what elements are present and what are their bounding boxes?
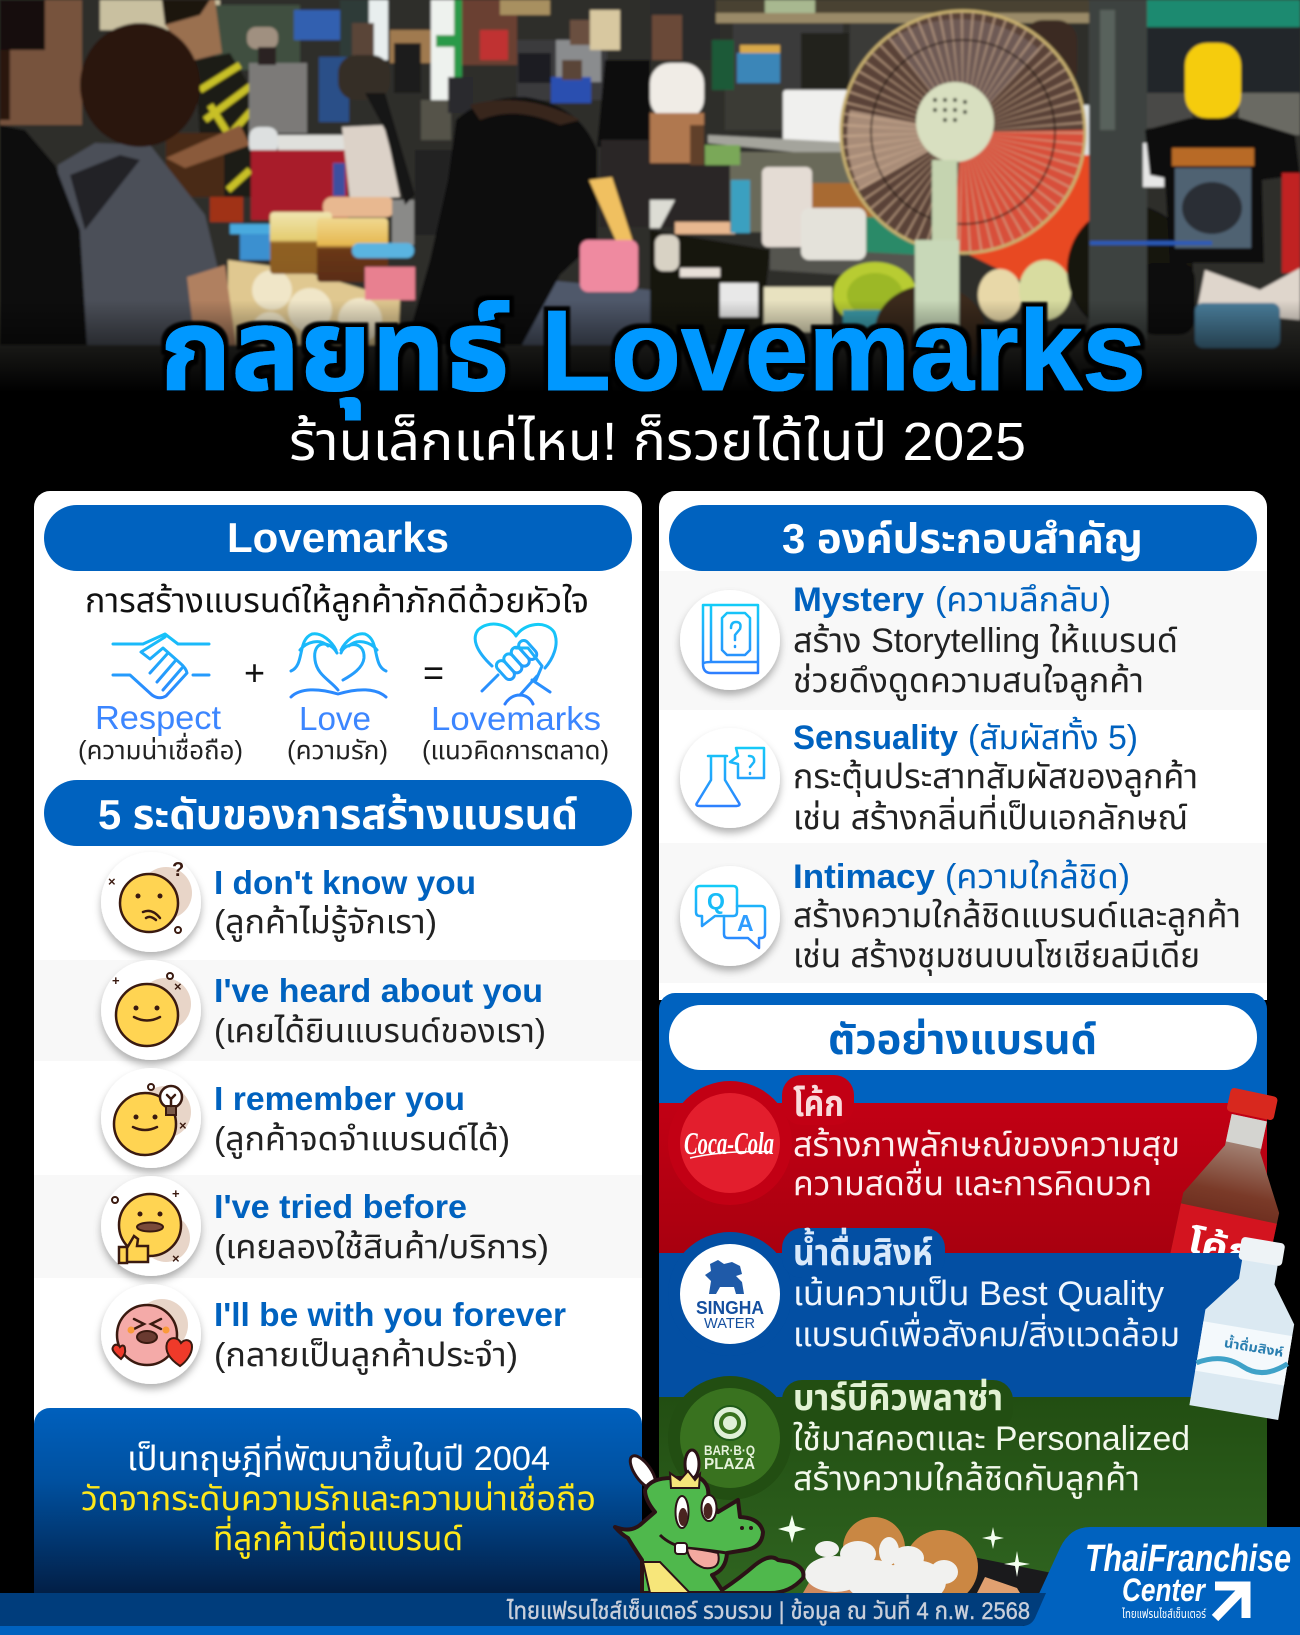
level 2: I've heard about you	[214, 972, 543, 1009]
woman with long black hair	[514, 277, 650, 345]
label: Lovemarks: Lovemarks	[431, 700, 601, 737]
level 4: (เคยลองใช้สินค้า/บริการ)	[214, 1228, 549, 1265]
element: Intimacy	[680, 858, 1241, 976]
element: Sensuality: เช่น สร้างกลิ่นที่เป็นเอกลักษณ์	[793, 794, 1188, 837]
level 1: (ลูกค้าไม่รู้จักเรา)	[214, 903, 437, 942]
brand: Singha water: แบรนด์เพื่อสังคม/สิ่งแวดล้อม	[793, 1311, 1180, 1354]
callout: theory: วัดจากระดับความรักและความน่าเชื่อถือ	[81, 1475, 596, 1518]
label: Lovemarks	[422, 700, 609, 765]
panel: 3 elements (right)	[659, 491, 1267, 1000]
hero photo: street food stall	[0, 0, 1300, 410]
label: Respect: (ความน่าเชื่อถือ)	[78, 732, 243, 765]
brand: Bar-B-Q Plaza: บาร์บีคิวพลาซ่า	[793, 1377, 1003, 1418]
heading: Lovemarks: Lovemarks	[227, 514, 449, 561]
shelves	[716, 0, 1094, 13]
level 2: +	[112, 973, 120, 988]
right side back	[1147, 0, 1300, 27]
element: Mystery: (ความลึกลับ)	[935, 581, 1111, 619]
back of market	[100, 0, 220, 30]
level 4: ×	[172, 1251, 180, 1266]
element: Mystery: สร้าง Storytelling ให้แบรนด์	[793, 622, 1178, 660]
menu board	[650, 230, 770, 345]
panel: lovemarks (left)	[34, 491, 642, 1593]
brand: Singha water	[659, 1227, 1267, 1397]
row band	[34, 1175, 642, 1278]
cooler	[249, 127, 278, 155]
t-shirt on hanger	[1145, 118, 1300, 263]
callout: theory: เป็นทฤษฎีที่พัฒนาขึ้นในปี 2004	[127, 1435, 550, 1478]
melons	[978, 269, 1022, 321]
level 5: (กลายเป็นลูกค้าประจำ)	[214, 1336, 518, 1375]
label: Love	[287, 700, 388, 765]
row band	[34, 960, 642, 1061]
definition text: การสร้างแบรนด์ให้ลูกค้าภักดีด้วยหัวใจ	[85, 582, 589, 621]
coke bottle	[1166, 1082, 1300, 1296]
logo panel	[1020, 1527, 1300, 1635]
footer source bar: ไทยแฟรนไชส์เซ็นเตอร์ รวบรวม | ข้อมูล ณ วันที่ 4 ก.พ. 2568	[506, 1594, 1030, 1626]
footer source bar	[0, 1593, 1046, 1626]
level 4	[101, 1176, 549, 1276]
element: Sensuality: กระตุ้นประสาทสัมผัสของลูกค้า	[793, 758, 1198, 797]
woman with ponytail	[338, 55, 390, 100]
level 1	[101, 852, 476, 952]
bottom strip	[0, 1626, 1300, 1635]
element: Sensuality	[680, 716, 1198, 837]
element: Mystery: Mystery	[793, 581, 924, 619]
level 4: I've tried before	[214, 1188, 467, 1225]
mascot: green crocodile	[615, 1450, 803, 1593]
logo panel: ไทยแฟรนไชส์เซ็นเตอร์	[1121, 1607, 1206, 1621]
brand: Bar-B-Q Plaza: สร้างความใกล้ชิดกับลูกค้า	[793, 1460, 1140, 1499]
blurred person in blue	[319, 57, 349, 122]
element: Mystery	[680, 581, 1178, 701]
brand: Coca-Cola: สร้างภาพลักษณ์ของความสุข	[793, 1126, 1180, 1165]
icon: handshake	[113, 634, 209, 698]
icon: flask and question	[696, 748, 764, 806]
brand: Singha water: น้ำดื่มสิงห์	[793, 1227, 933, 1273]
plus sign: +	[244, 652, 265, 693]
level 5	[101, 1284, 566, 1384]
level 1: ?	[172, 859, 184, 881]
heading: Lovemarks	[44, 505, 632, 571]
level 3: I remember you	[214, 1080, 465, 1117]
title: กลยุทธ์ Lovemarks	[160, 288, 1146, 420]
subtitle: ร้านเล็กแค่ไหน! ก็รวยได้ในปี 2025	[289, 412, 1026, 472]
bar-b-q plaza logo: PLAZA	[704, 1456, 755, 1473]
icon: arrow	[1215, 1586, 1246, 1618]
items by fan	[764, 287, 832, 332]
fan	[841, 11, 1085, 253]
level 4: +	[172, 1186, 180, 1201]
level 3: (ลูกค้าจดจำแบรนด์ได้)	[214, 1120, 510, 1159]
food tray	[803, 1517, 1062, 1604]
brand: Singha water: เน้นความเป็น Best Quality	[793, 1275, 1164, 1313]
level 3	[101, 1068, 510, 1168]
label: Respect: Respect	[95, 699, 221, 736]
coca-cola logo: Coca-Cola	[684, 1125, 774, 1161]
level 3: ×	[179, 1118, 187, 1133]
vendor in white cap	[600, 140, 733, 227]
heading: 3 elements: 3 องค์ประกอบสำคัญ	[782, 515, 1143, 562]
brand: Coca-Cola: โค้ก	[793, 1083, 844, 1124]
icon: Q and A chat: Q	[707, 888, 725, 914]
equals sign: =	[423, 652, 444, 693]
callout: theory	[34, 1408, 642, 1593]
level 1: ×	[108, 874, 116, 889]
row band	[659, 843, 1267, 983]
row band	[659, 571, 1267, 710]
element: Mystery: ช่วยดึงดูดความสนใจลูกค้า	[793, 662, 1144, 701]
bar-b-q plaza logo: BAR·B·Q	[704, 1442, 755, 1458]
label: Respect	[78, 699, 243, 765]
brand: Bar-B-Q Plaza	[659, 1376, 1267, 1604]
icon: heart hands	[291, 634, 386, 697]
singha logo	[696, 1260, 764, 1332]
water bottle: น้ำดื่มสิงห์	[1223, 1333, 1285, 1360]
panel: brand examples	[659, 993, 1300, 1604]
brand: Coca-Cola	[659, 1075, 1300, 1296]
level 5: I'll be with you forever	[214, 1296, 566, 1333]
element: Intimacy: สร้างความใกล้ชิดแบรนด์และลูกค้า	[793, 897, 1241, 936]
icon: hands clasped in heart	[475, 624, 556, 704]
logo panel: Center	[1122, 1572, 1206, 1608]
element: Sensuality: (สัมผัสทั้ง 5)	[968, 716, 1138, 757]
callout: theory: ที่ลูกค้ามีต่อแบรนด์	[213, 1515, 463, 1559]
level 2	[101, 960, 546, 1060]
level 2: ×	[174, 979, 182, 994]
element: Sensuality: Sensuality	[793, 719, 958, 757]
heading: brand examples	[669, 1005, 1257, 1070]
element: Intimacy: Intimacy	[793, 858, 935, 896]
mouth	[660, 1535, 727, 1553]
label: Love: (ความรัก)	[287, 735, 388, 765]
brand: Coca-Cola: ความสดชื่น และการคิดบวก	[793, 1160, 1152, 1203]
singha logo: WATER	[704, 1315, 755, 1332]
element: Intimacy: เช่น สร้างชุมชนบนโซเชียลมีเดีย	[793, 937, 1200, 976]
element: Intimacy: (ความใกล้ชิด)	[945, 858, 1130, 896]
bar-b-q plaza logo	[704, 1406, 755, 1473]
red poster	[960, 120, 1090, 293]
water bottle	[1189, 1233, 1300, 1420]
level 1: I don't know you	[214, 864, 476, 901]
mohawk man	[162, 0, 222, 60]
brand: Bar-B-Q Plaza: ใช้มาสคอตและ Personalized	[793, 1420, 1190, 1458]
icon: Q and A chat: A	[737, 910, 754, 936]
singha logo: SINGHA	[696, 1298, 764, 1318]
icon: Q and A chat	[696, 886, 765, 948]
left man	[0, 0, 82, 125]
level 2: (เคยได้ยินแบรนด์ของเรา)	[214, 1012, 546, 1049]
heading: 5 levels: 5 ระดับของการสร้างแบรนด์	[98, 791, 578, 838]
grey man	[249, 63, 307, 133]
coca-cola logo	[684, 1125, 774, 1161]
grey shirt woman	[58, 143, 236, 345]
heading: 3 elements	[669, 505, 1257, 571]
icon: question book	[703, 605, 758, 673]
food counter	[228, 260, 400, 345]
dark pole	[1089, 0, 1147, 340]
sparkles	[778, 1515, 1030, 1577]
label: Love: Love	[299, 700, 371, 737]
coke bottle: โค้ก	[1184, 1222, 1257, 1273]
eyes	[676, 1496, 688, 1528]
label: Lovemarks: (แนวคิดการตลาด)	[422, 735, 609, 765]
heading: 5 levels	[44, 780, 632, 846]
heading: brand examples: ตัวอย่างแบรนด์	[828, 1016, 1097, 1063]
crown	[670, 1471, 700, 1488]
